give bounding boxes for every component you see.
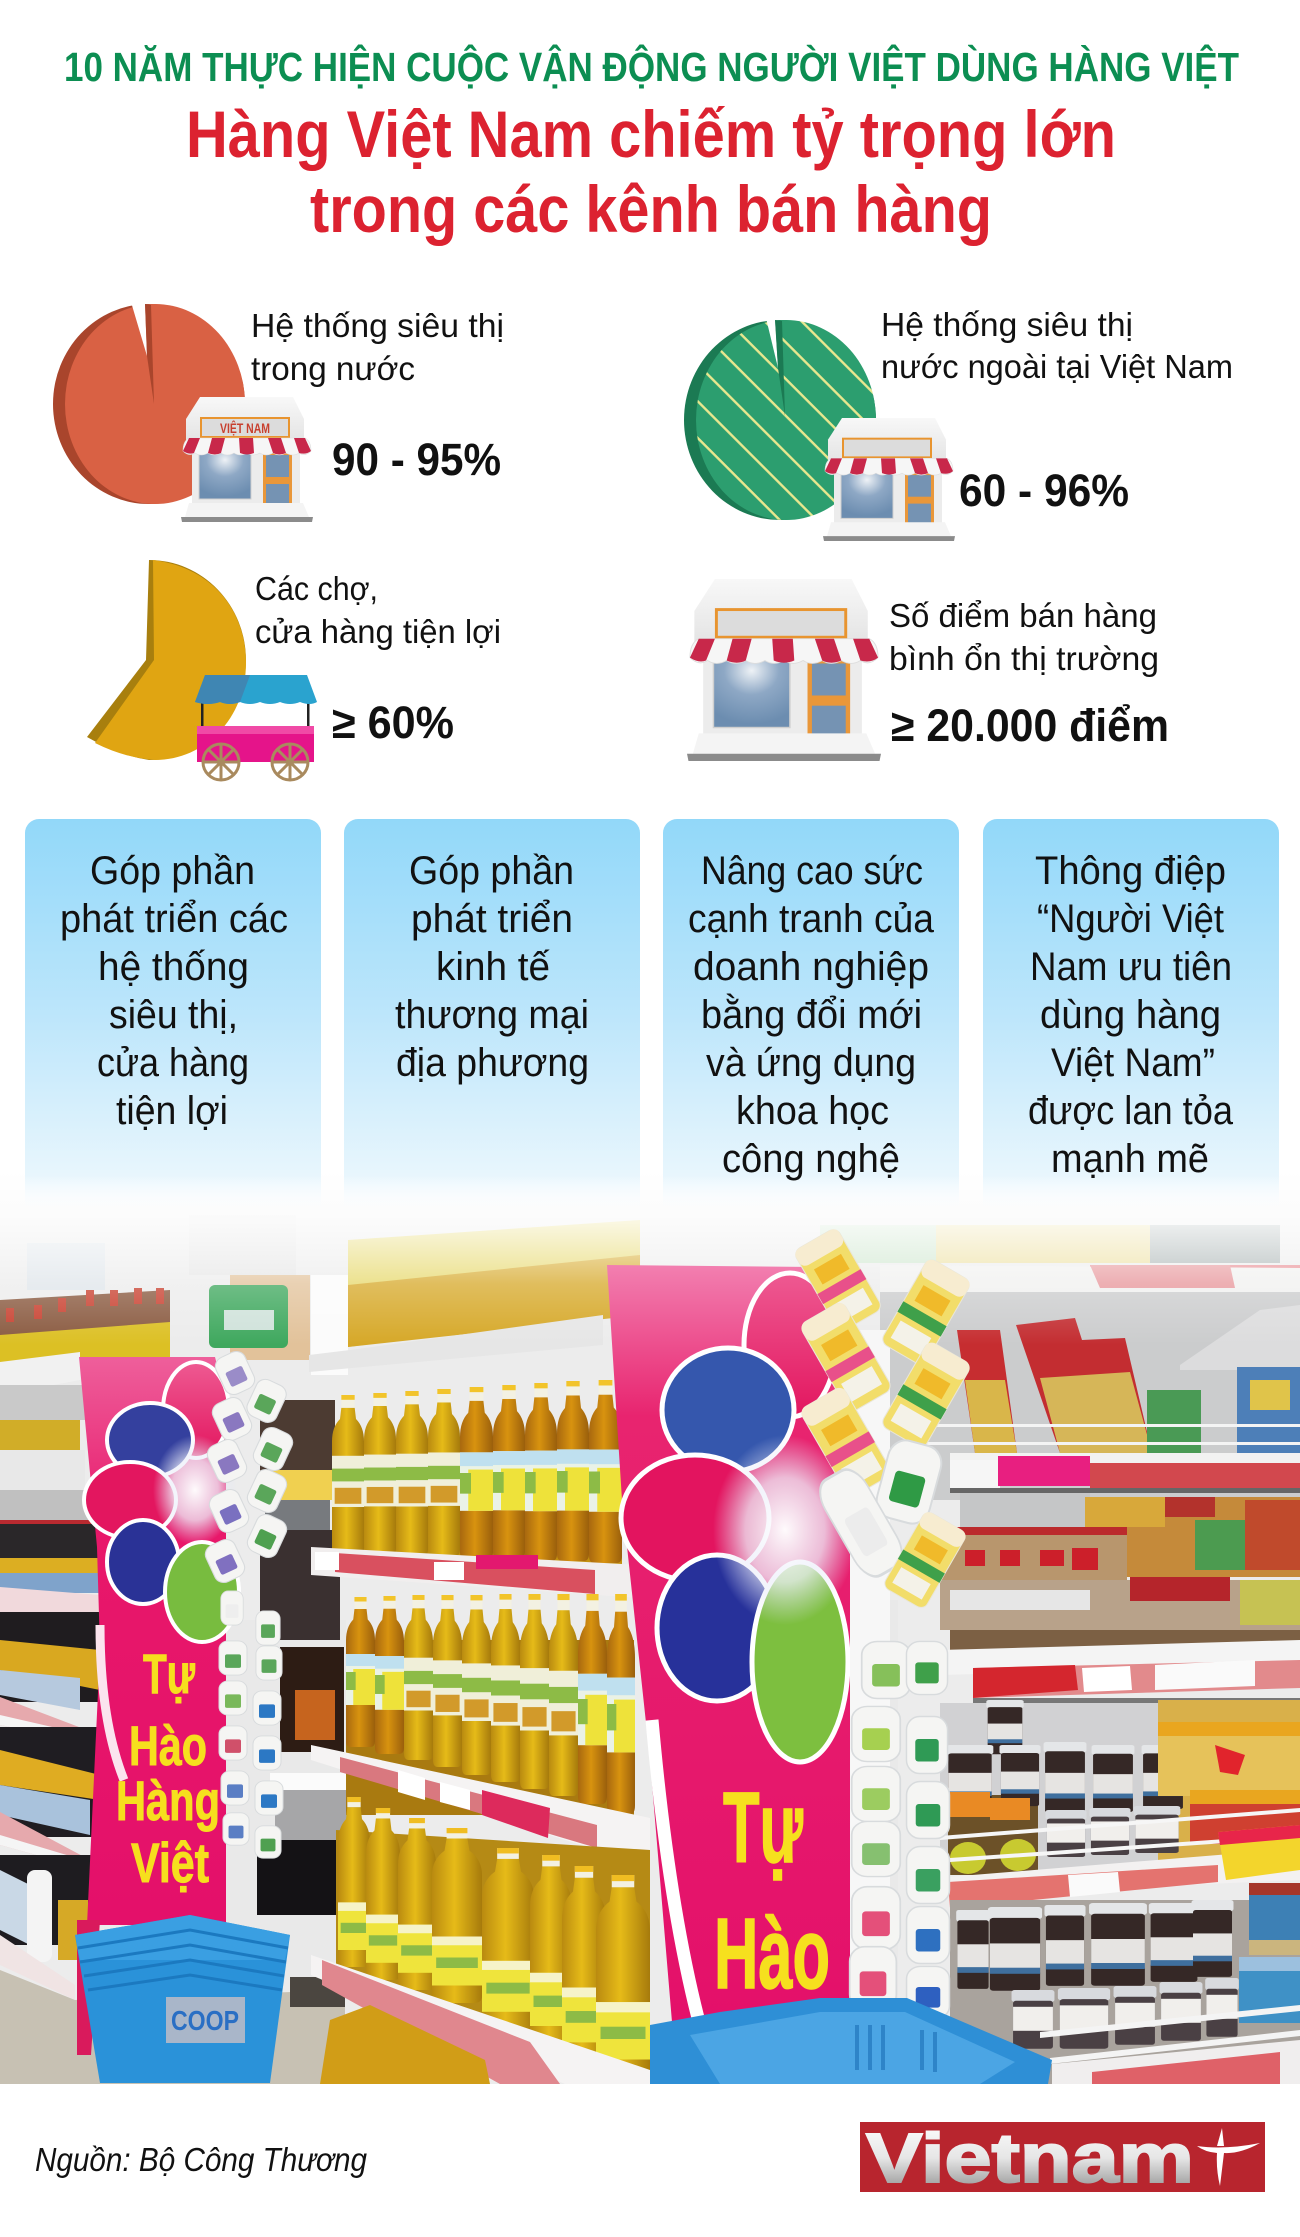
shelf edge 3 and lower oil <box>311 1955 650 2084</box>
panel: retail systems: hệ thống <box>98 945 249 989</box>
floor <box>0 1970 345 2084</box>
green sign <box>209 1285 288 1348</box>
pie chart: 60% <box>87 560 246 760</box>
stat: market stabilisation points <box>687 579 1169 761</box>
banner text: Hàng <box>116 1769 220 1832</box>
panel: message: Nam ưu tiên <box>1030 945 1232 989</box>
tan jars <box>940 1527 1300 1650</box>
small jars <box>1012 1978 1239 2049</box>
main title line 1: Hàng Việt Nam chiếm tỷ trọng lớn <box>186 97 1116 171</box>
oil bottles row 3 <box>336 1797 650 2084</box>
bottom rail and shelf <box>1040 2005 1300 2084</box>
left banner <box>77 1357 239 2055</box>
pink shelf with yellow tag <box>948 1825 1300 1908</box>
label: Các chợ, <box>255 570 378 607</box>
big hanging strip <box>793 1227 972 2020</box>
cans row <box>960 1493 1300 1577</box>
banner text: Việt <box>131 1831 209 1894</box>
panel: retail systems <box>25 819 321 1215</box>
logo: Vietnam+: Vietnam <box>866 2119 1194 2197</box>
oil bottles row 2 <box>346 1594 635 1815</box>
panel: competitiveness: doanh nghiệp <box>693 945 929 989</box>
label <box>881 306 1233 385</box>
panel: competitiveness <box>663 819 959 1215</box>
left basket: COOP <box>171 2005 239 2036</box>
yellow jars <box>1158 1722 1300 1844</box>
main title line 2: trong các kênh bán hàng <box>310 172 992 246</box>
panel: retail systems: cửa hàng <box>97 1041 249 1085</box>
panel: competitiveness: Nâng cao sức <box>701 849 923 893</box>
panel: local commerce: thương mại <box>395 993 589 1037</box>
petals <box>621 1273 848 1762</box>
panel: local commerce <box>344 819 640 1215</box>
big banner <box>607 1265 857 2022</box>
label: nước ngoài tại Việt Nam <box>881 348 1233 385</box>
panel: local commerce: phát triển <box>411 897 573 941</box>
petals <box>84 1362 239 1642</box>
left hanging strip <box>202 1348 296 1858</box>
banner text: Tự <box>723 1772 803 1884</box>
panel: retail systems: phát triển các <box>60 897 288 941</box>
icon: store Viet Nam: VIỆT NAM <box>220 419 270 436</box>
left wall and shelves <box>0 1352 100 2000</box>
left basket <box>75 1915 290 2083</box>
background left of centre <box>230 1275 348 1375</box>
label: bình ổn thị trường <box>889 640 1159 677</box>
label: Hệ thống siêu thị <box>881 306 1133 343</box>
label: cửa hàng tiện lợi <box>255 613 501 650</box>
lower jars background <box>950 1900 1300 2084</box>
red price shelf <box>940 1640 1300 1703</box>
panel: retail systems: tiện lợi <box>116 1089 228 1133</box>
top-left bottles <box>0 1288 170 1362</box>
panel: competitiveness: và ứng dụng <box>706 1041 916 1085</box>
panel: competitiveness: công nghệ <box>722 1137 900 1181</box>
right wall <box>880 1265 1300 1500</box>
large dark jars <box>956 1900 1234 1991</box>
back aisle <box>226 1400 347 2007</box>
panel: message: Việt Nam” <box>1051 1041 1215 1085</box>
label <box>255 570 501 650</box>
blue jars right <box>1239 1883 1300 2023</box>
panel: competitiveness: cạnh tranh của <box>688 897 935 941</box>
shelf edge 1 <box>311 1547 640 1598</box>
logo: Vietnam+ <box>860 2119 1265 2197</box>
right basket <box>650 1998 1052 2084</box>
shelf edge 2 <box>311 1745 650 1850</box>
pie chart: 90-95% <box>53 302 245 504</box>
banner text <box>116 1642 220 1894</box>
banner text <box>714 1772 830 2010</box>
pie chart: 60-96% <box>684 318 876 520</box>
panel: local commerce: Góp phần <box>409 849 574 893</box>
label: Hệ thống siêu thị <box>251 307 504 344</box>
panel: local commerce: kinh tế <box>436 945 550 989</box>
value: ≥ 20.000 điểm <box>891 700 1169 751</box>
header <box>64 44 1239 246</box>
panel: message: dùng hàng <box>1040 993 1221 1037</box>
icon: cart <box>195 675 317 780</box>
value: 60 - 96% <box>959 465 1129 516</box>
wire rack <box>920 1424 1300 1445</box>
photo: supermarket shelves <box>0 1170 1300 2084</box>
panel: message <box>983 819 1279 1215</box>
stat: markets and convenience stores <box>87 560 501 780</box>
label <box>889 597 1159 677</box>
centre upper shelf <box>309 1315 603 1372</box>
far background items <box>27 1215 1300 1290</box>
stat: domestic supermarkets <box>53 302 504 522</box>
banner text: Hào <box>714 1898 830 2010</box>
panel: message: Thông điệp <box>1035 849 1226 893</box>
label <box>251 307 504 387</box>
panel: competitiveness: khoa học <box>736 1089 889 1133</box>
panels row <box>25 819 1279 1215</box>
panel: retail systems: Góp phần <box>90 849 255 893</box>
jar shelf background <box>940 1700 1300 1880</box>
panel: local commerce: địa phương <box>396 1041 589 1085</box>
panel: message: được lan tỏa <box>1028 1089 1234 1133</box>
red shelf with tag <box>950 1453 1300 1493</box>
wire rails middle <box>940 1808 1300 1862</box>
panel: retail systems: siêu thị, <box>109 993 238 1037</box>
value: ≥ 60% <box>332 697 454 748</box>
oil bottles row 1 <box>332 1380 622 1566</box>
banner text: Hào <box>129 1714 207 1777</box>
source: Nguồn: Bộ Công Thương <box>35 2141 368 2178</box>
panel: message: mạnh mẽ <box>1051 1137 1209 1181</box>
label: Số điểm bán hàng <box>889 597 1157 634</box>
panel: message: “Người Việt <box>1037 897 1224 941</box>
banner text: Tự <box>143 1642 195 1705</box>
middle jars <box>947 1700 1184 1813</box>
value: 90 - 95% <box>332 434 501 485</box>
icon: store Viet Nam <box>181 397 313 522</box>
icon: store <box>823 418 955 541</box>
orange bottles <box>950 1792 1036 1874</box>
red product boxes <box>957 1318 1300 1453</box>
photo bottom edge <box>0 2084 1300 2094</box>
white jars <box>1045 1806 1180 1857</box>
top-centre faded oil <box>348 1220 640 1347</box>
label: trong nước <box>251 350 415 387</box>
stat: foreign supermarkets <box>684 306 1233 541</box>
photo fade to white <box>0 1170 1300 1345</box>
icon: big store <box>687 579 881 761</box>
panel: competitiveness: bằng đổi mới <box>701 992 922 1037</box>
